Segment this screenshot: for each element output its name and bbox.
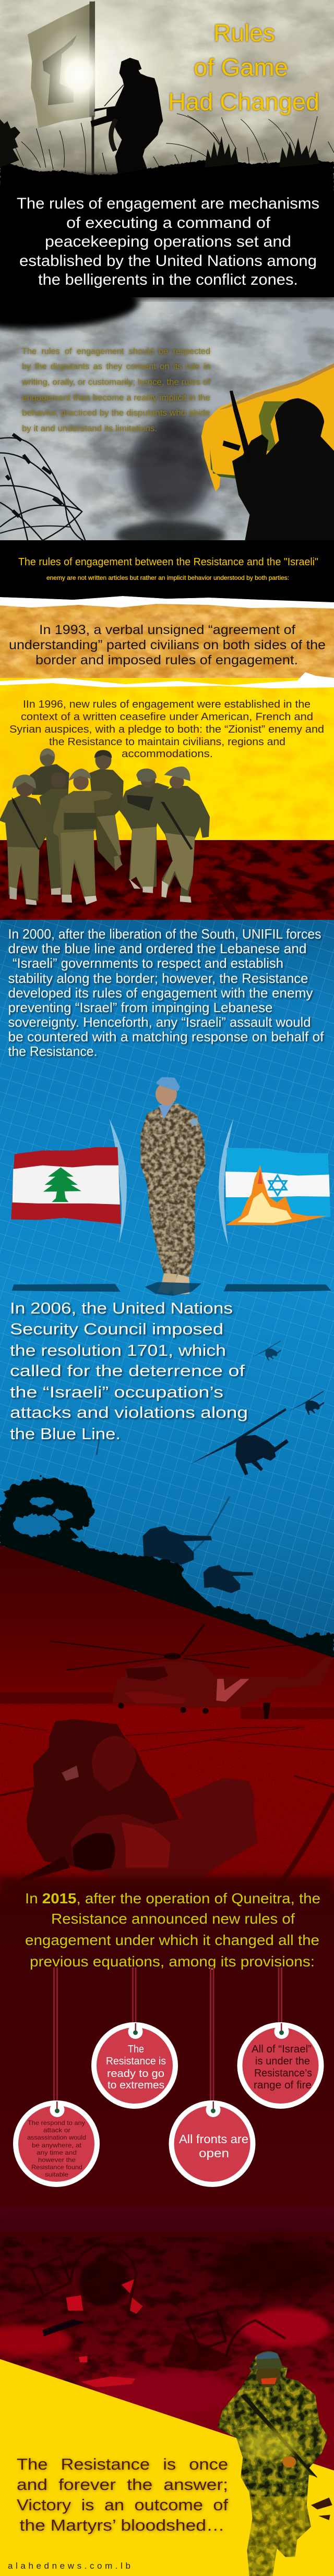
panel: black band	[0, 540, 334, 600]
panel: red helicopter photo	[0, 1545, 334, 1898]
hanging tag: ready to go to extremes: Resistance is	[106, 2056, 166, 2067]
text block: definition of rules of engagement: the belligerents in the conflict zones.	[38, 271, 298, 288]
text block: 1993 agreement: understanding” parted civilians on both sides of the	[9, 638, 326, 652]
text block: respected by the disputants: by it and understand its limitations.	[22, 423, 157, 433]
text block: 2000 UNIFIL: In 2000, after the liberation of the South, UNIFIL forces	[8, 926, 321, 942]
icon: soldier silhouette	[90, 58, 163, 180]
soldier middle rear	[40, 772, 68, 895]
horizon strip	[0, 1692, 113, 1704]
soldier back left	[30, 748, 69, 795]
hanging tag: ready to go to extremes: to extremes	[108, 2080, 164, 2091]
text block: 2015 Quneitra: In 2015, after the operation of Quneitra, the	[25, 1890, 320, 1906]
text block: 2000 UNIFIL: “Israeli” governments to respect and establish	[13, 955, 283, 971]
text block: respected by the disputants: engagement then become a reality implicit in the	[22, 393, 210, 403]
icon: camouflaged soldier running	[217, 2351, 332, 2576]
flag and soldier ground shadows	[11, 1282, 331, 1296]
text block: definition of rules of engagement: The rules of engagement are mechanisms	[17, 195, 319, 212]
text block: 1993 agreement: In 1993, a verbal unsigned “agreement of	[39, 623, 295, 637]
hanging tag: all of Israel under range of fire: Resistance’s	[254, 2068, 312, 2079]
heading: rules between the Resistance and the enemy: The rules of engagement between the Resistance and the "Israeli"	[18, 556, 318, 568]
grass silhouette	[0, 114, 334, 198]
source credit: alahednews.com.lb	[8, 2561, 130, 2571]
text block: 1996 ceasefire: Syrian auspices, with a pledge to both: the “Zionist” enemy and	[9, 724, 324, 735]
hanging tag: respond to any attack: The respond to any	[28, 2119, 85, 2127]
text block: 2006 resolution 1701: In 2006, the United Nations	[10, 1299, 233, 1317]
hanging tag: all of Israel under range of fire: is under the	[255, 2056, 310, 2067]
hanging tag: respond to any attack: be anywhere, at	[32, 2142, 82, 2149]
panel: yellow triangle	[0, 2359, 334, 2576]
text block: 2000 UNIFIL: preventing “Israel” from impinging Lebanese	[8, 1000, 272, 1015]
hanging tag: all fronts are open: open	[199, 2146, 229, 2160]
text block: closing statement: The Resistance is once	[17, 2455, 228, 2473]
text block: respected by the disputants: by the disputants as they consent on its rule in	[22, 361, 210, 371]
hanging tag: respond to any attack: assassination would	[27, 2134, 86, 2141]
burnt vehicle left	[32, 2243, 136, 2304]
icon: yellow flag	[201, 363, 334, 492]
panel: yellow background	[0, 672, 334, 841]
text block: 2000 UNIFIL: sovereignty. Henceforth, any “Israeli” assault would	[8, 1014, 311, 1030]
text block: 1996 ceasefire: the Resistance to maintain civilians, regions and	[49, 736, 285, 748]
text block: 1993 agreement	[9, 623, 326, 667]
text block: respected by the disputants	[21, 346, 210, 433]
text block: respected by the disputants: The rules of engagement should be respected	[22, 346, 210, 356]
text block: 2006 resolution 1701: Security Council imposed	[10, 1320, 223, 1338]
icon: barbed wire	[0, 434, 85, 540]
text block: respected by the disputants: behavior, practiced by the disputants who abide	[22, 408, 210, 418]
text block: 2006 resolution 1701: attacks and violations along	[10, 1403, 248, 1421]
text block: definition of rules of engagement: established by the United Nations among	[19, 252, 317, 270]
icon: UN peacekeeper	[140, 1077, 206, 1295]
text block: 2006 resolution 1701	[10, 1299, 248, 1443]
hanging tag: all fronts are open	[169, 1967, 256, 2187]
hanging tag: respond to any attack: Resistance found	[31, 2164, 82, 2171]
soldier far right	[152, 767, 210, 903]
text block: 2015 Quneitra: engagement under which it changed all the	[25, 1932, 319, 1948]
icon: Israeli flag burning	[225, 1148, 330, 1225]
hanging tag: respond to any attack: any time and	[37, 2149, 77, 2156]
icon: group of infantry soldiers	[0, 748, 210, 905]
text block: 1993 agreement: border and imposed rules of engagement.	[35, 653, 298, 667]
title: Had Changed	[168, 88, 319, 115]
text block: 1996 ceasefire	[9, 699, 324, 760]
text block: 2006 resolution 1701: the resolution 1701, which	[10, 1341, 226, 1359]
soldier centre pointing	[53, 769, 113, 905]
panel: blue grid background	[0, 920, 334, 1660]
burnt vehicle right	[186, 2273, 328, 2358]
hanging tag: ready to go to extremes: The	[128, 2044, 144, 2055]
hanging tag: ready to go to extremes	[91, 1967, 178, 2109]
icon: yellow-and-olive flag on pole	[28, 1, 95, 179]
text block: 2000 UNIFIL: stability along the border; however, the Resistance	[8, 970, 308, 986]
text block: 2006 resolution 1701: the Blue Line.	[10, 1425, 121, 1443]
text block: closing statement	[17, 2455, 228, 2534]
text block: 2000 UNIFIL: drew the blue line and ordered the Lebanese and	[8, 941, 307, 956]
panel: smoke and barbed wire with soldier	[0, 275, 334, 550]
panel: orange torn paper	[0, 589, 334, 688]
icon: helicopters	[188, 1341, 325, 1475]
hanging tag: respond to any attack	[13, 1967, 100, 2187]
icon: soldier with rifle silhouette	[223, 391, 334, 540]
icon: Lebanese flag	[11, 1147, 121, 1224]
panel: hero sky with flag-bearer	[0, 0, 334, 313]
text block: definition of rules of engagement: peacekeeping operations set and	[45, 233, 291, 250]
text block: 2000 UNIFIL: the Resistance.	[8, 1043, 97, 1059]
kneeling soldier and casualty	[13, 1719, 258, 1898]
soldier right rear	[118, 769, 169, 893]
transport helicopter	[50, 1624, 334, 1719]
icon: tanks	[142, 1526, 253, 1593]
panel: red rubble	[0, 840, 334, 920]
text block: closing statement: the Martyrs’ bloodshed…	[20, 2516, 225, 2534]
text block: 2006 resolution 1701: the “Israeli” occupation’s	[10, 1383, 223, 1401]
text block: 2000 UNIFIL	[8, 926, 324, 1059]
text block: 2000 UNIFIL: developed its rules of engagement with the enemy	[8, 985, 313, 1001]
dark treeline along the diagonal	[0, 1439, 334, 1659]
text block: closing statement: Victory is an outcome of	[17, 2496, 228, 2514]
hanging tag: respond to any attack: however the	[38, 2156, 76, 2164]
title	[168, 19, 319, 115]
text block: definition of rules of engagement: of executing a command of	[66, 214, 271, 232]
text block: definition of rules of engagement	[17, 195, 319, 288]
text block: 1996 ceasefire: context of a written ceasefire under American, French and	[21, 711, 313, 723]
soldier back right	[89, 750, 124, 871]
text block: 2015 Quneitra: previous equations, among its provisions:	[30, 1953, 315, 1970]
hanging tag: all of Israel under range of fire: range of fire	[254, 2080, 312, 2091]
title: of Game	[194, 54, 288, 81]
hanging tag: all of Israel under range of fire: All of “Israel”	[252, 2044, 312, 2055]
fire	[226, 1165, 327, 1225]
icon: curved blue-line arcs	[109, 1118, 234, 1246]
text block: 2015 Quneitra	[25, 1890, 320, 1970]
panel: red wreckage photo	[0, 2206, 334, 2474]
heading: rules between the Resistance and the enemy	[18, 556, 318, 581]
text block: respected by the disputants: writing, orally, or customarily; hence, the rules of	[21, 377, 210, 387]
hanging tag: all fronts are open: All fronts are	[179, 2132, 248, 2146]
text block: 1996 ceasefire: accommodations.	[122, 748, 213, 760]
text block: 2006 resolution 1701: called for the deterrence of	[10, 1362, 245, 1380]
text block: closing statement: and forever the answer;	[17, 2475, 228, 2494]
panel: dark red section	[0, 1877, 334, 2240]
soldier far left	[0, 774, 50, 905]
heading: rules between the Resistance and the enemy: enemy are not written articles but rather an implicit behavior understood by both parties:	[46, 574, 289, 581]
hanging tag: ready to go to extremes: ready to go	[107, 2068, 164, 2080]
hanging tag: respond to any attack: attack or	[43, 2127, 70, 2134]
text block: 2000 UNIFIL: be countered with a matching response on behalf of	[8, 1029, 324, 1044]
hanging tag: all of Israel under range of fire	[237, 1967, 324, 2109]
hanging tag: respond to any attack: suitable	[45, 2171, 68, 2178]
text block: 1996 ceasefire: IIn 1996, new rules of engagement were established in the	[23, 699, 311, 710]
title: Rules	[213, 19, 275, 46]
text block: 2015 Quneitra: Resistance announced new rules of	[51, 1911, 295, 1927]
